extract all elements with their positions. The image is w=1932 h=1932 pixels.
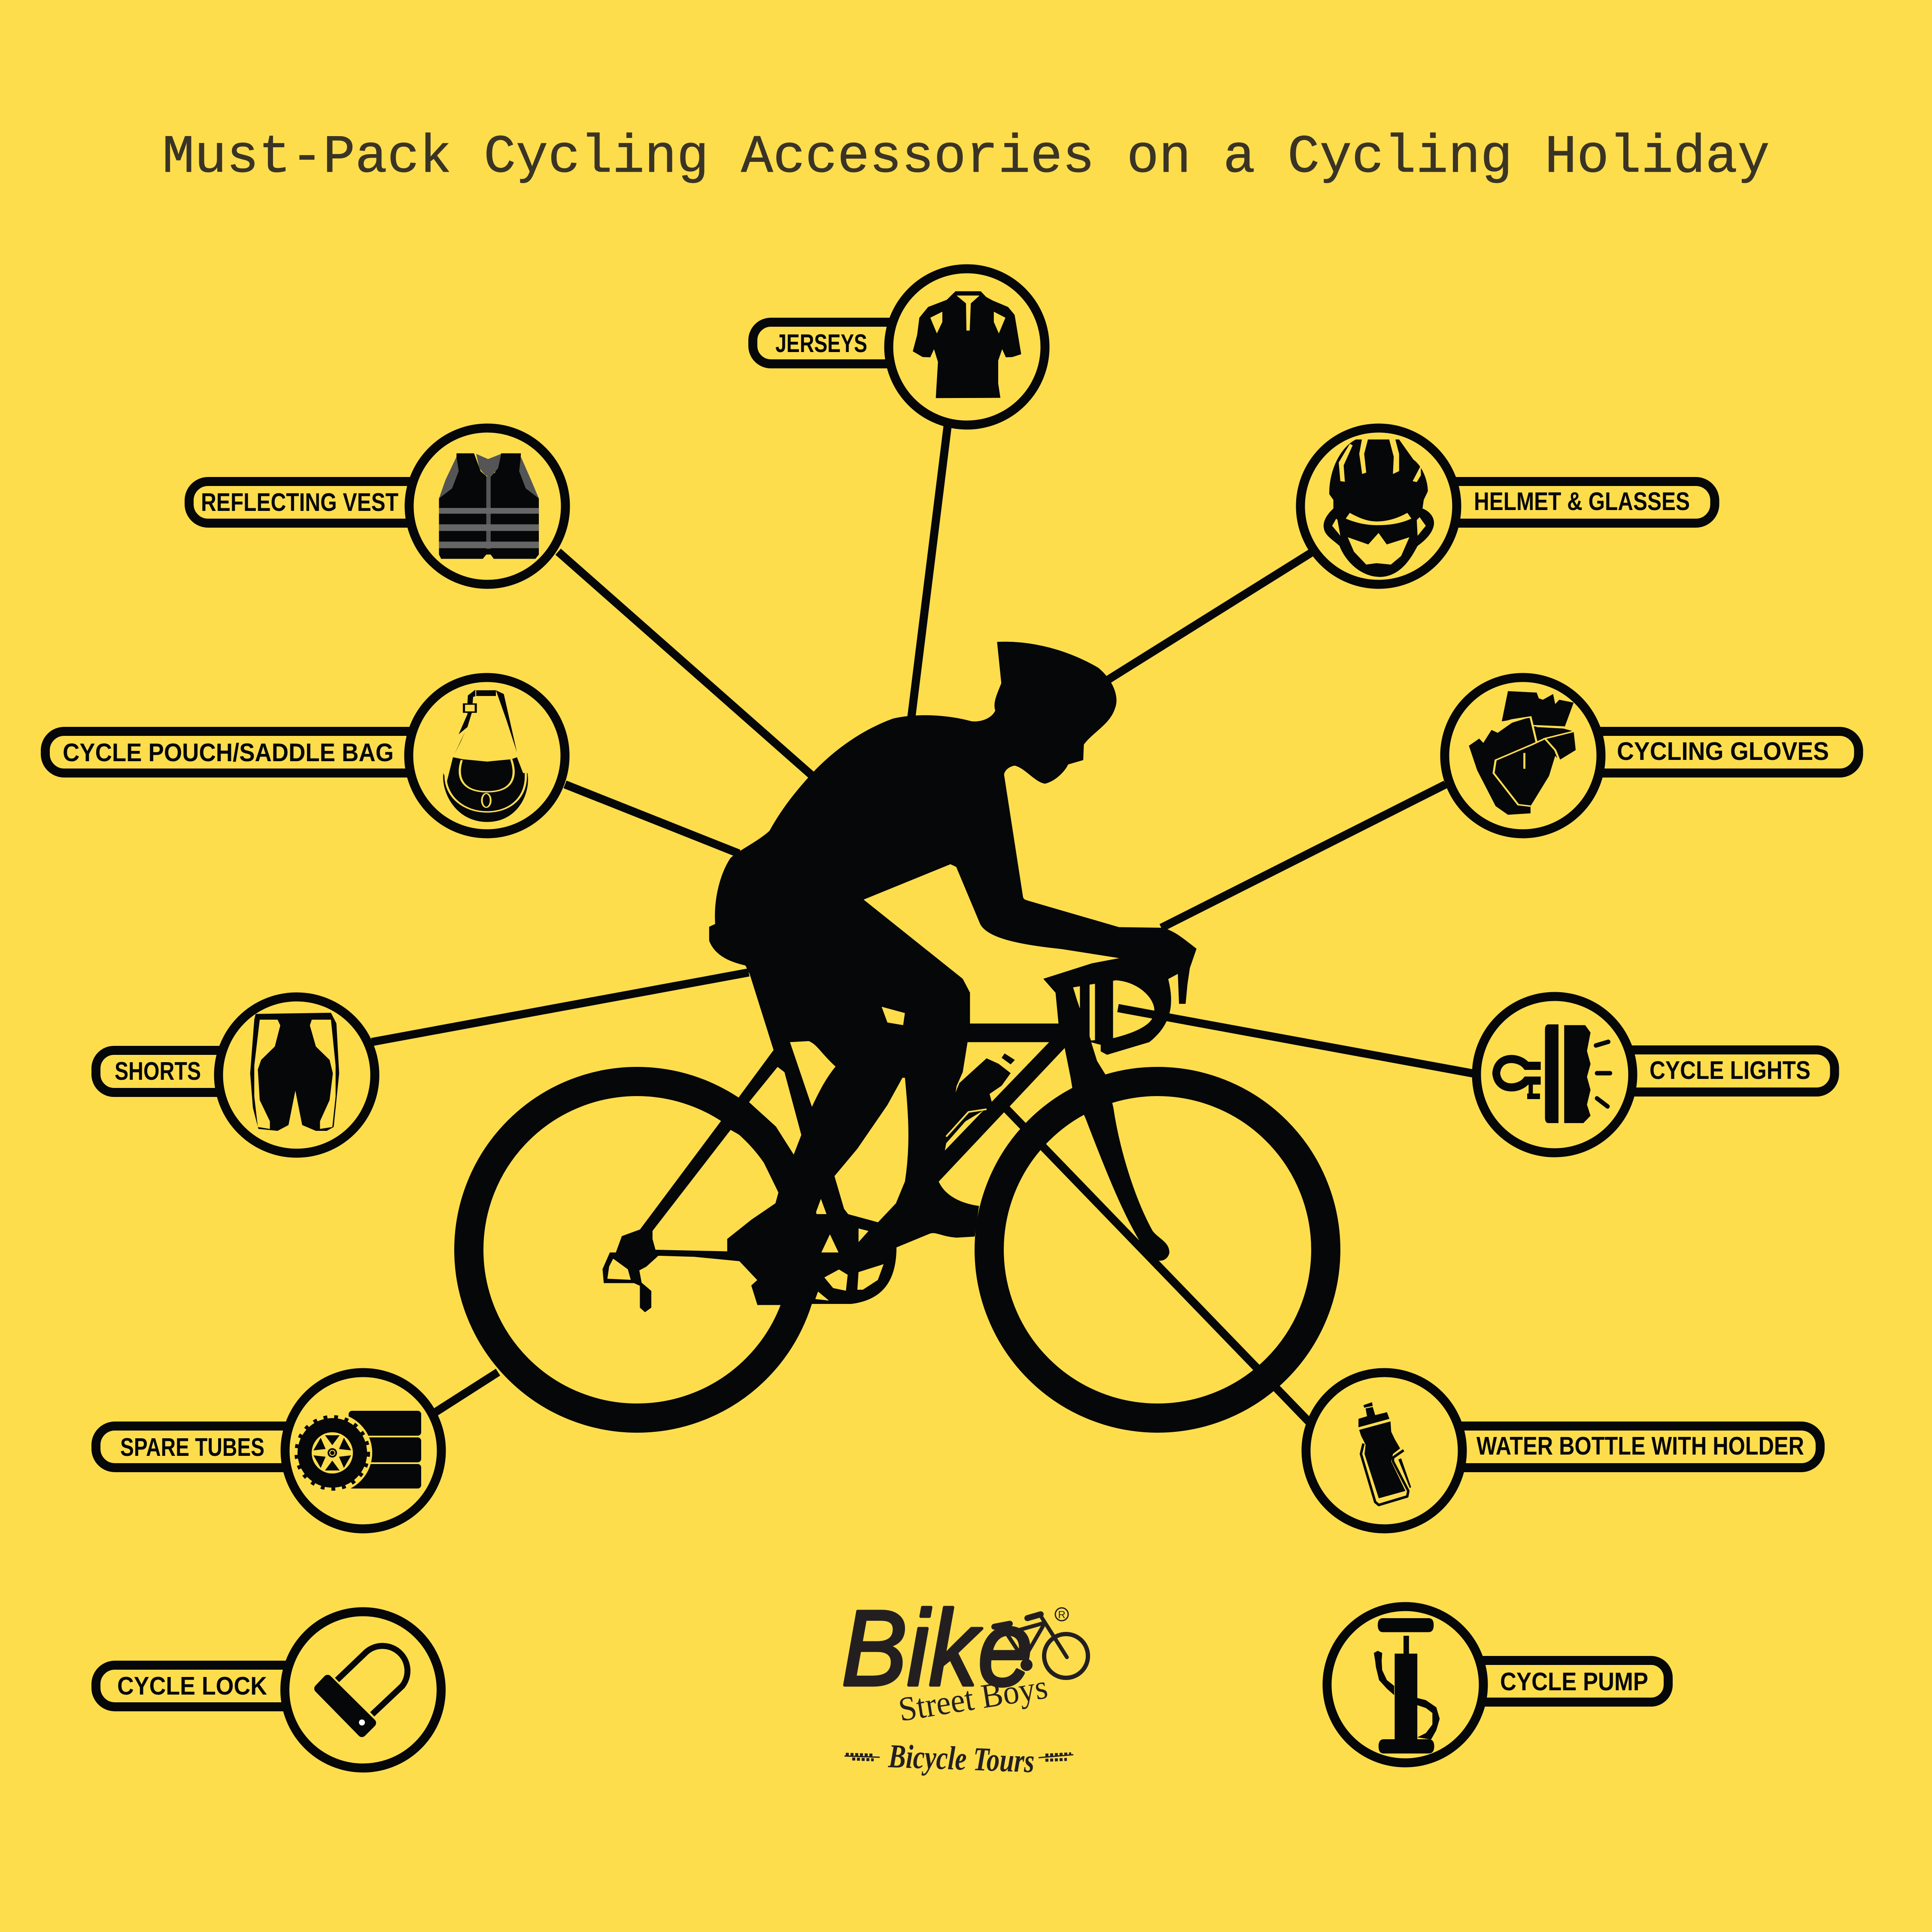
- callout: cycle lock: CYCLE LOCK: [117, 1672, 267, 1700]
- water bottle on frame: [942, 1054, 1015, 1151]
- wheat ornament left: [844, 1754, 880, 1760]
- connector lines: [372, 423, 1446, 1413]
- callout: cycle lock: [96, 1612, 441, 1768]
- callout: shorts: [96, 997, 375, 1153]
- callout: cycle pouch: CYCLE POUCH/SADDLE BAG: [63, 738, 394, 767]
- registered mark: [1055, 1608, 1068, 1621]
- callout: water bottle with holder: [1306, 1373, 1820, 1529]
- rider and bicycle silhouette: [469, 642, 1326, 1418]
- callout: spare tubes: SPARE TUBES: [120, 1433, 264, 1461]
- icon: tubes and tyre: [292, 1411, 421, 1493]
- logo: Bike Street Boys Bicycle Tours: [841, 1588, 1088, 1780]
- callout: spare tubes: [96, 1373, 441, 1529]
- callout: water bottle with holder: WATER BOTTLE WITH HOLDER: [1476, 1432, 1804, 1460]
- cycle lights connector line: [1118, 1008, 1475, 1074]
- title: Must-Pack Cycling Accessories on a Cycling Holiday: [162, 127, 1770, 188]
- logo bicycle icon: [994, 1614, 1088, 1678]
- callout: cycling gloves: CYCLING GLOVES: [1617, 737, 1829, 766]
- callout: shorts: SHORTS: [115, 1057, 201, 1085]
- callout: cycling gloves: [1445, 677, 1859, 834]
- logo line Street Boys: Street Boys: [896, 1668, 1050, 1729]
- wheat ornament right: [1039, 1754, 1073, 1760]
- callout: cycle lights: [1476, 996, 1835, 1153]
- registered mark: R: [1058, 1609, 1066, 1621]
- icon: gloves: [1469, 691, 1576, 815]
- icon: shorts: [250, 1013, 339, 1131]
- callout: cycle pouch: [46, 677, 565, 834]
- cycle light on handlebar: [1080, 979, 1113, 1042]
- icon: u-lock: [319, 1646, 407, 1733]
- icon: jersey: [913, 291, 1021, 398]
- water bottle connector line: [998, 1100, 1309, 1422]
- front wheel: [989, 1081, 1326, 1418]
- icon: vest: [439, 453, 539, 559]
- callout: reflecting vest: REFLECTING VEST: [201, 488, 398, 516]
- callout: helmet and glasses: HELMET & GLASSES: [1474, 487, 1690, 516]
- callout: cycle lights: CYCLE LIGHTS: [1649, 1056, 1810, 1084]
- icon: floor pump: [1374, 1618, 1440, 1753]
- callout: cycle pump: CYCLE PUMP: [1500, 1668, 1648, 1696]
- callout: jerseys: JERSEYS: [775, 329, 867, 358]
- callout: reflecting vest: [189, 428, 565, 584]
- icon: saddle bag: [443, 690, 528, 822]
- callout: helmet and glasses: [1300, 428, 1715, 584]
- rider and frame: [603, 642, 1196, 1312]
- callout: jerseys: [753, 269, 1045, 425]
- logo line Bicycle Tours: Bicycle Tours: [887, 1737, 1035, 1780]
- logo word Bike: Bike: [841, 1588, 1033, 1708]
- icon: helmet: [1324, 438, 1434, 577]
- rear wheel: [469, 1081, 805, 1418]
- icon: water bottle: [1358, 1402, 1411, 1505]
- icon: bike light: [1496, 1024, 1610, 1123]
- callout: cycle pump: [1327, 1607, 1668, 1763]
